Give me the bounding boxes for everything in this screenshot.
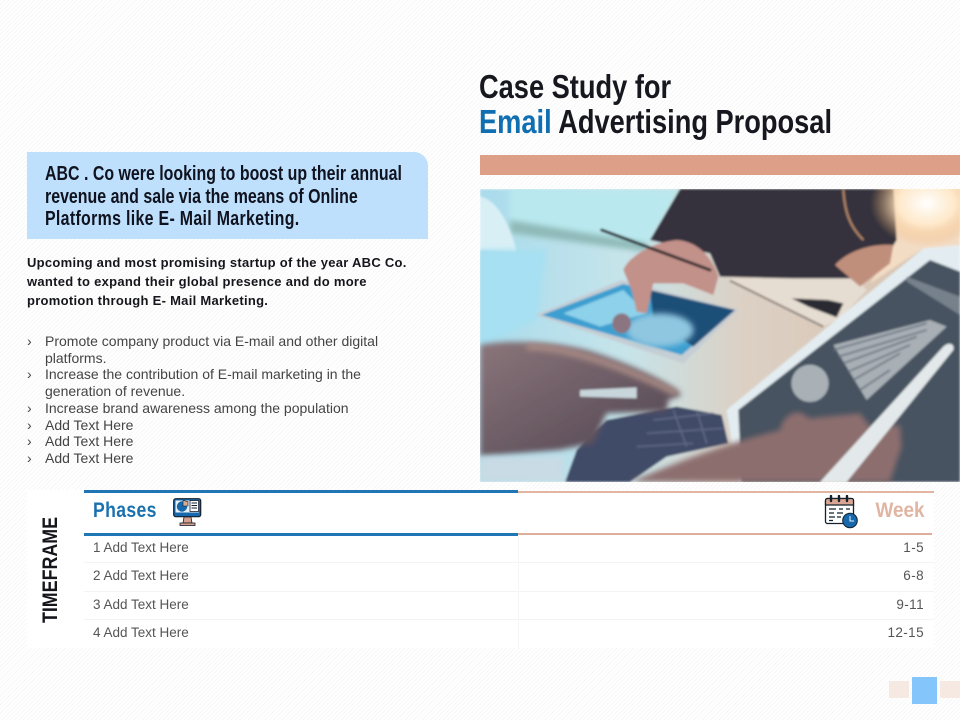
- title: Case Study for: [479, 68, 671, 105]
- header: week: Week: [875, 499, 924, 522]
- hand with pen: [623, 240, 718, 313]
- stylus: [820, 344, 954, 482]
- bullet list: ›: [27, 433, 32, 449]
- table rows: 2 Add Text Here: [93, 568, 189, 583]
- bullet list: Increase the contribution of E-mail marketing in the: [45, 366, 361, 382]
- title: Email Advertising Proposal: [479, 103, 832, 140]
- bullet list: Add Text Here: [45, 433, 133, 449]
- callout: intro summary: Platforms like E- Mail Marketing.: [45, 208, 299, 230]
- phases header rules: [84, 490, 518, 493]
- bullet list: [27, 333, 378, 466]
- icon: calendar with clock: [824, 495, 858, 528]
- text block: startup description: Upcoming and most promising startup of the year ABC Co.: [27, 255, 407, 270]
- table rows: 12-15: [887, 625, 924, 640]
- photo: hands with tablets at a desk: [480, 189, 960, 482]
- dark jacket: [650, 189, 903, 280]
- bullet list: Promote company product via E-mail and other digital: [45, 333, 378, 349]
- table rows: 3 Add Text Here: [93, 597, 189, 612]
- decorative squares: pager: [889, 677, 960, 704]
- foreground right hand: [630, 412, 902, 482]
- vertical heading: timeframe: [27, 490, 83, 648]
- header: phases: Phases: [93, 499, 157, 522]
- title accent bar: [480, 155, 960, 175]
- bullet list: generation of revenue.: [45, 383, 185, 399]
- bullet list: ›: [27, 400, 32, 416]
- bullet list: Add Text Here: [45, 417, 133, 433]
- tablet on desk: [535, 280, 738, 363]
- bullet list: ›: [27, 333, 32, 349]
- text block: startup description: wanted to expand their global presence and do more: [27, 274, 367, 289]
- table rows: [84, 536, 934, 648]
- table rows: 4 Add Text Here: [93, 625, 189, 640]
- text block: startup description: promotion through E- Mail Marketing.: [27, 293, 268, 308]
- bullet list: ›: [27, 417, 32, 433]
- table rows: 9-11: [896, 597, 924, 612]
- pen: [602, 230, 710, 270]
- icon: monitor with pie chart: [173, 498, 202, 526]
- table rows: 1-5: [903, 540, 924, 555]
- foreground left hand: [480, 342, 682, 457]
- bullet list: Increase brand awareness among the population: [45, 400, 349, 416]
- panel: timeframe table: [27, 490, 934, 648]
- bullet list: Add Text Here: [45, 450, 133, 466]
- vertical heading: timeframe: TIMEFRAME: [39, 517, 62, 623]
- bullet list: platforms.: [45, 350, 106, 366]
- callout: intro summary: [27, 152, 428, 239]
- bullet list: ›: [27, 450, 32, 466]
- bullet list: ›: [27, 366, 32, 382]
- text block: startup description: [27, 255, 407, 308]
- callout: intro summary: ABC . Co were looking to boost up their annual: [45, 163, 402, 185]
- right tablet: [727, 245, 960, 482]
- keyboard: [565, 407, 728, 482]
- back laptop: [728, 278, 867, 327]
- title: [479, 68, 832, 140]
- callout: intro summary: revenue and sale via the means of Online: [45, 186, 358, 208]
- table rows: 6-8: [903, 568, 924, 583]
- week header rules: [518, 491, 934, 493]
- table rows: 1 Add Text Here: [93, 540, 189, 555]
